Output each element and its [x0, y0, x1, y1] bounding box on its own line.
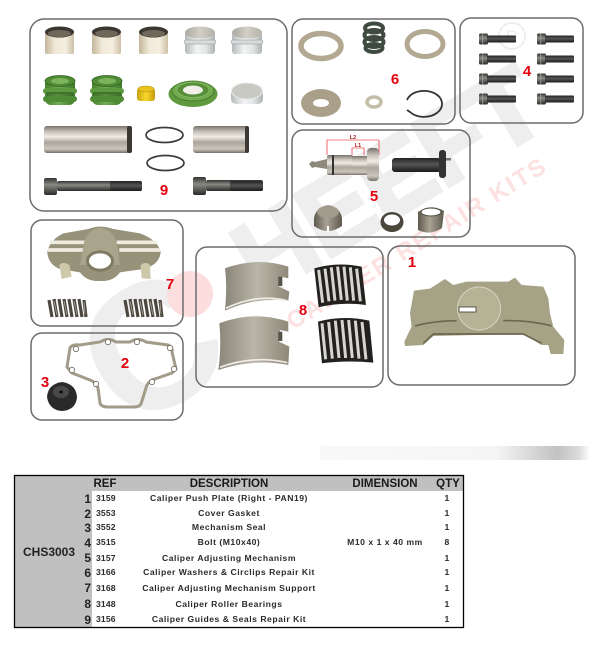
dimension value: M10 x 1 x 40 mm	[347, 537, 423, 547]
cover gasket	[67, 340, 176, 407]
reference codes: 3166	[96, 567, 116, 577]
descriptions: Mechanism Seal	[192, 522, 266, 532]
dimension lines L1 L2: L2	[350, 135, 356, 141]
quantities: 1	[445, 599, 450, 609]
table border	[14, 476, 464, 628]
descriptions: Cover Gasket	[198, 508, 260, 518]
row numbers: 4	[84, 536, 91, 550]
white rows area	[92, 491, 463, 627]
mechanism seal	[47, 382, 77, 411]
threaded screw	[392, 150, 451, 178]
support casting	[47, 227, 161, 281]
panel 1: push plate	[388, 246, 575, 385]
circlip	[407, 91, 442, 117]
roller shoes	[218, 262, 289, 370]
descriptions: Caliper Washers & Circlips Repair Kit	[143, 567, 315, 577]
row numbers: 9	[84, 613, 91, 627]
reference codes: 3148	[96, 599, 116, 609]
table header: DESCRIPTION	[190, 478, 268, 490]
flat washer	[301, 89, 341, 117]
number 6: 6	[391, 71, 399, 88]
beige bushings	[45, 26, 168, 54]
panel 5: adjusting mechanism	[292, 130, 470, 237]
reference codes: 3157	[96, 553, 116, 563]
descriptions: Caliper Adjusting Mechanism	[162, 553, 296, 563]
small silver cap	[231, 83, 263, 104]
kit code: CHS3003	[23, 545, 75, 559]
steel sleeves	[314, 205, 444, 233]
watermark: grey letter C: C	[43, 228, 260, 467]
watermark: red slogan: CALIPER REPAIR KITS	[282, 153, 551, 335]
number 3: 3	[41, 374, 49, 391]
plate	[404, 278, 564, 354]
watermark: grey brand letters: HEEFT	[214, 44, 563, 317]
small washer	[367, 97, 381, 107]
quantities: 1	[445, 553, 450, 563]
large washers	[301, 32, 443, 58]
reference codes: 3156	[96, 614, 116, 624]
dimension lines L1 L2	[327, 135, 379, 155]
watermark: registered mark	[499, 23, 525, 49]
support springs	[49, 299, 162, 317]
panel 2 and 3: gasket and seal	[31, 333, 183, 420]
table header: DIMENSION	[352, 478, 418, 490]
needle cages	[314, 265, 373, 363]
silver caps	[184, 26, 263, 54]
quantities	[445, 493, 450, 624]
quantities: 1	[445, 508, 450, 518]
quantities: 1	[445, 583, 450, 593]
descriptions	[142, 493, 316, 624]
number 1: 1	[408, 254, 416, 271]
row numbers: 6	[84, 566, 91, 580]
plate slot	[459, 307, 476, 312]
row numbers	[84, 492, 91, 627]
panel 7: mechanism support	[31, 220, 183, 326]
number 8: 8	[299, 302, 307, 319]
number 2: 2	[121, 355, 129, 372]
row numbers: 8	[84, 597, 91, 611]
reference codes: 3159	[96, 493, 116, 503]
grey table frame	[14, 476, 464, 628]
reference codes: 3168	[96, 583, 116, 593]
eight flange bolts	[479, 34, 574, 104]
reference codes: 3553	[96, 508, 116, 518]
quantities: 1	[445, 567, 450, 577]
quantities: 1	[445, 522, 450, 532]
gasket holes	[69, 339, 177, 387]
green flat seal	[168, 81, 218, 107]
table header	[94, 478, 460, 490]
shadow strip	[320, 446, 590, 460]
number 5: 5	[370, 188, 378, 205]
quantities: 8	[445, 537, 450, 547]
descriptions: Bolt (M10x40)	[198, 537, 260, 547]
number 7: 7	[166, 276, 174, 293]
descriptions: Caliper Push Plate (Right - PAN19)	[150, 493, 308, 503]
coil spring	[364, 24, 384, 52]
panel 9: guides and seals kit	[30, 19, 287, 211]
row numbers: 7	[84, 581, 91, 595]
long guide pin	[44, 126, 132, 153]
row numbers: 5	[84, 551, 91, 565]
descriptions: Caliper Roller Bearings	[176, 599, 282, 609]
panel 6: washers and circlips	[292, 19, 455, 124]
number 4: 4	[523, 63, 532, 80]
o-rings	[146, 128, 184, 170]
descriptions: Caliper Adjusting Mechanism Support	[142, 583, 316, 593]
reference codes	[96, 493, 116, 624]
adjuster body	[309, 148, 379, 181]
quantities: 1	[445, 493, 450, 503]
parts table	[14, 476, 464, 628]
long bolt	[44, 178, 142, 195]
dimension lines L1 L2: L1	[355, 143, 361, 149]
table header: QTY	[436, 478, 460, 490]
short guide pin	[193, 126, 249, 153]
green boots	[43, 76, 124, 105]
watermark: registered mark: R	[506, 27, 518, 46]
watermark logo	[43, 23, 563, 467]
panel 8: roller bearings	[196, 247, 383, 387]
plate lower edge	[415, 321, 552, 343]
panel 4: bolts	[460, 18, 583, 123]
number 9: 9	[160, 182, 168, 199]
row numbers: 1	[84, 492, 91, 506]
reference codes: 3552	[96, 522, 116, 532]
quantities: 1	[445, 614, 450, 624]
row numbers: 2	[84, 507, 91, 521]
watermark: red dot	[167, 271, 213, 317]
plate centre disc	[458, 287, 500, 330]
row numbers: 3	[84, 521, 91, 535]
descriptions: Caliper Guides & Seals Repair Kit	[152, 614, 306, 624]
short bolt	[193, 177, 263, 195]
yellow seal	[137, 86, 155, 101]
reference codes: 3515	[96, 537, 116, 547]
table header: REF	[94, 478, 116, 490]
